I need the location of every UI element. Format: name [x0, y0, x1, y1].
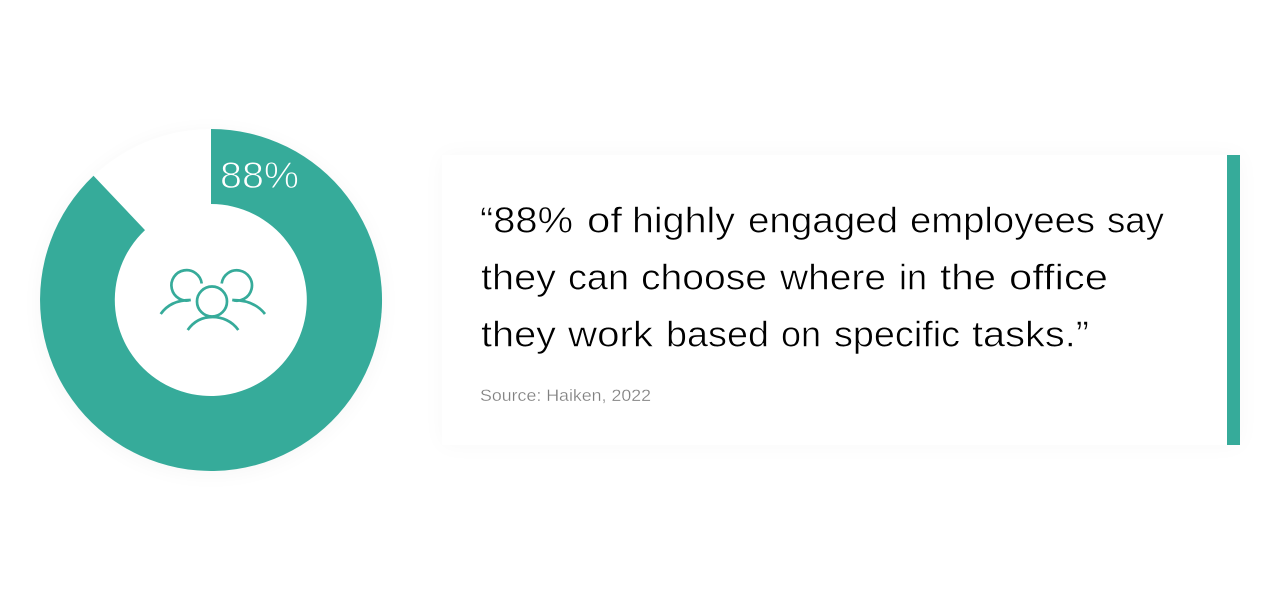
icon: group of people [161, 270, 265, 330]
quote text: engaged [748, 200, 898, 240]
accent bar [1227, 155, 1240, 445]
quote text: they [481, 314, 556, 354]
donut value label: 88% [220, 155, 299, 196]
quote text: can [568, 256, 629, 298]
quote text [480, 200, 1164, 354]
quote text: specific [834, 314, 960, 354]
quote text: where [779, 256, 886, 298]
quote text: the [940, 256, 996, 298]
quote text: based [666, 314, 769, 354]
quote text: employees [910, 200, 1095, 240]
quote text: say [1107, 200, 1164, 240]
quote text: on [781, 314, 821, 354]
quote text: work [567, 314, 654, 354]
quote text: office [1009, 256, 1108, 298]
quote text: tasks.” [972, 314, 1089, 354]
panel: quote card [442, 155, 1240, 445]
quote text: they [481, 256, 556, 298]
quote text: of [587, 200, 623, 240]
quote text: “88% [480, 200, 573, 240]
source citation: Source: Haiken, 2022 [480, 386, 651, 405]
quote text: highly [632, 200, 735, 240]
quote text: choose [641, 256, 767, 298]
donut chart: 88% segment [40, 129, 382, 471]
quote text: in [899, 256, 927, 298]
